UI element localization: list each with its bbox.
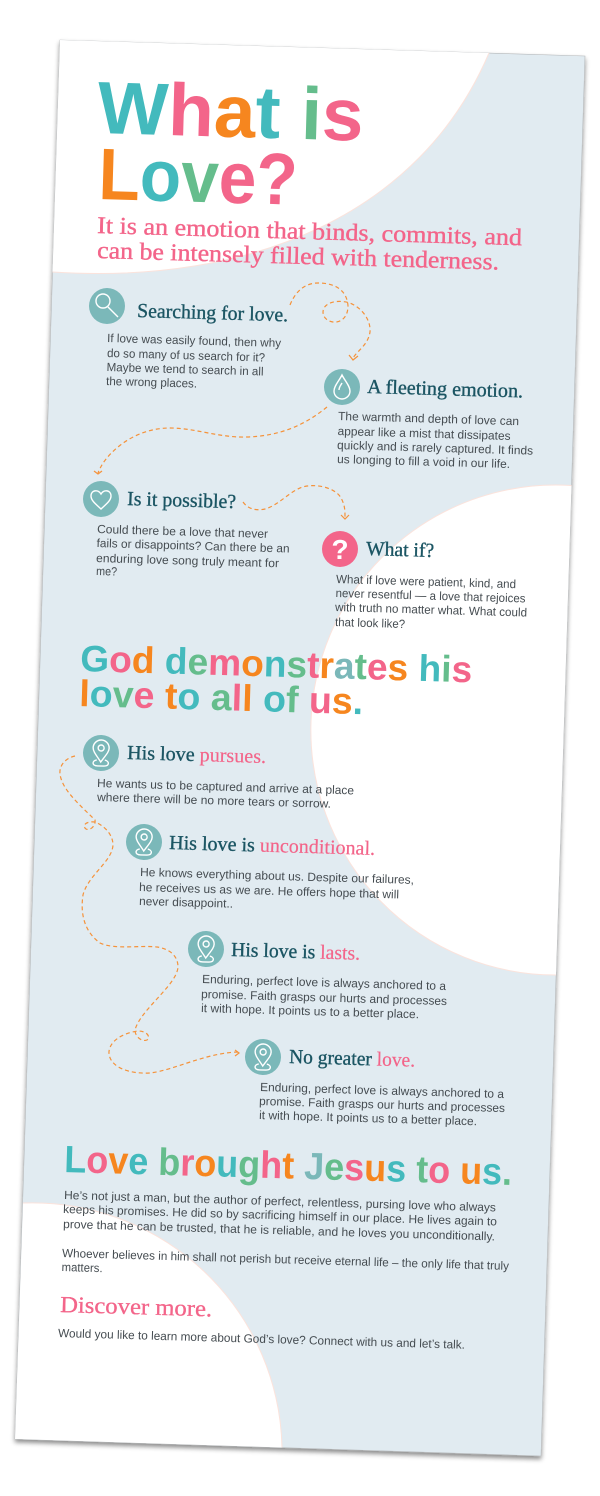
item: a fleeting emotion: [324, 369, 533, 471]
icon: location pin: [82, 734, 120, 772]
heading: no greater love: No greater love.: [289, 1046, 415, 1072]
icon: location pin: [187, 930, 225, 968]
text: his love is unconditional body: He knows everything about us. Despite our failures,: [140, 865, 414, 887]
heading: what if: What if?: [366, 538, 435, 562]
text: his love is unconditional body: he receives us as we are. He offers hope that will: [139, 880, 399, 901]
heading: god demonstrates: [79, 638, 473, 722]
text: searching for love body: the wrong places.: [106, 374, 197, 391]
arrow: possible to what if: [243, 486, 349, 519]
text: is it possible body: Could there be a love that never: [97, 522, 268, 541]
item: what if: [322, 531, 527, 631]
heading: a fleeting emotion: A fleeting emotion.: [367, 376, 523, 402]
heading: is it possible: Is it possible?: [127, 488, 237, 513]
text: his love lasts body: [201, 972, 447, 1021]
text: no greater love body: promise. Faith grasps our hurts and processes: [259, 1094, 505, 1115]
text: no greater love body: [259, 1080, 505, 1128]
heading: his love is unconditional: His love is unconditional.: [169, 832, 375, 860]
title: [97, 66, 365, 221]
icon: heart: [83, 481, 119, 517]
text: his love lasts body: it with hope. It points us to a better place.: [201, 1001, 419, 1021]
heading: discover more: Discover more.: [60, 1292, 213, 1321]
title: Love?: [98, 134, 299, 221]
heading: his love pursues: His love pursues.: [127, 742, 266, 768]
text: jesus paragraph: keeps his promises. He did so by sacrificing himself in our place. He lives again to: [63, 1202, 498, 1229]
text: is it possible body: fails or disappoints? Can there be an: [96, 536, 290, 556]
text: no greater love body: Enduring, perfect love is always anchored to a: [260, 1080, 505, 1101]
text: searching for love body: Maybe we tend to search in all: [106, 360, 264, 379]
text: what if body: that look like?: [335, 615, 406, 631]
icon: location pin: [244, 1038, 282, 1076]
icon: magnifying glass: [89, 288, 125, 324]
text: discover more body: Would you like to learn more about God’s love? Connect with us and let’s talk.: [58, 1326, 465, 1352]
icon: location pin: [125, 823, 163, 861]
text: a fleeting emotion body: [337, 409, 533, 471]
text: searching for love body: [106, 331, 281, 391]
text: a fleeting emotion body: The warmth and depth of love can: [338, 409, 519, 428]
text: what if body: with truth no matter what. What could: [334, 600, 527, 620]
title: What is: [97, 66, 365, 157]
item: searching for love: [89, 288, 288, 391]
text: is it possible body: enduring love song truly meant for: [96, 551, 279, 570]
item: is it possible: [83, 481, 290, 579]
text: searching for love body: If love was easily found, then why: [107, 331, 281, 350]
text: his love lasts body: promise. Faith grasps our hurts and processes: [201, 987, 447, 1008]
text: jesus paragraph: prove that he can be trusted, that he is reliable, and he loves you unconditionally.: [63, 1217, 495, 1243]
icon: question mark: [322, 531, 358, 567]
item: his love is unconditional: [125, 823, 414, 911]
text: a fleeting emotion body: quickly and is rarely captured. It finds: [337, 438, 533, 458]
item: no greater love: [244, 1038, 505, 1128]
text: is it possible body: me?: [96, 564, 118, 579]
icon: water drop: [324, 369, 360, 405]
text: what if body: [334, 572, 527, 631]
text: his love is unconditional body: [139, 865, 414, 911]
arrow: fleeting to possible: [94, 407, 327, 474]
text: his love pursues body: [96, 776, 355, 811]
text: his love lasts body: Enduring, perfect love is always anchored to a: [202, 972, 447, 993]
text: is it possible body: [96, 522, 290, 579]
heading: his love is lasts: His love is lasts.: [231, 939, 360, 965]
icon: question mark: ?: [331, 534, 349, 565]
item: his love lasts: [187, 930, 447, 1021]
text: his love pursues body: where there will be no more tears or sorrow.: [96, 790, 331, 811]
text: jesus paragraph: [63, 1188, 498, 1243]
text: a fleeting emotion body: appear like a mist that dissipates: [337, 424, 511, 443]
subtitle: It is an emotion that binds, commits, and: [97, 213, 522, 251]
subtitle: can be intensely filled with tenderness.: [97, 238, 499, 276]
text: what if body: What if love were patient, kind, and: [336, 572, 516, 591]
text: his love is unconditional body: never disappoint..: [139, 894, 233, 911]
subtitle: [97, 213, 522, 276]
text: no greater love body: it with hope. It points us to a better place.: [259, 1108, 477, 1128]
item: his love pursues: [82, 734, 355, 811]
heading: love brought jesus to us: Love brought Jesus to us.: [64, 1139, 513, 1194]
text: a fleeting emotion body: us longing to fill a void in our life.: [337, 452, 510, 471]
arrow: winding dashed route between love items: [60, 756, 239, 1073]
heading: god demonstrates: God demonstrates his: [80, 638, 473, 690]
text: whoever believes paragraph: matters.: [61, 1260, 103, 1275]
text: searching for love body: do so many of us search for it?: [107, 346, 266, 365]
text: his love pursues body: He wants us to be captured and arrive at a place: [97, 776, 355, 797]
arrow: searching to fleeting: [290, 283, 370, 360]
heading: searching for love: Searching for love.: [137, 300, 288, 326]
text: whoever believes paragraph: Whoever believes in him shall not perish but receive eternal life – the only life that truly: [62, 1246, 509, 1273]
heading: god demonstrates: love to all of us.: [79, 673, 364, 722]
text: what if body: never resentful — a love that rejoices: [335, 586, 526, 605]
text: jesus paragraph: He’s not just a man, but the author of perfect, relentless, pursing love who always: [64, 1188, 496, 1214]
